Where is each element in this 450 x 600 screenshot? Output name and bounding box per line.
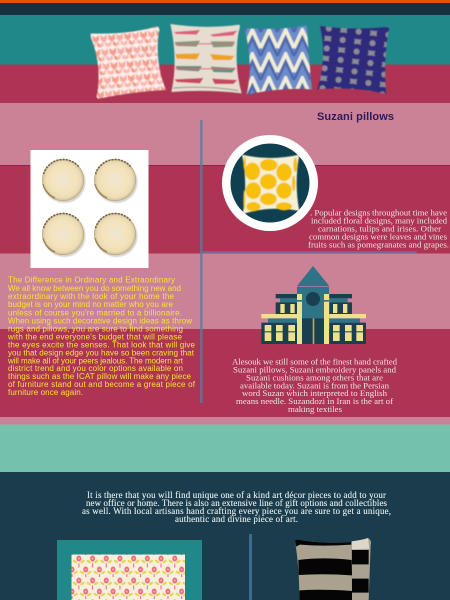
text block: Alesouk: Suzani pillows, Suzani embroidery panels and [233,364,397,374]
text block: the difference in ordinary and extraordinary: of furniture stand out and become a great piece of [8,380,196,389]
text block: Alesouk: word Suzan which interpreted to English [242,388,388,398]
pillow: pink chevron [91,26,166,99]
text block: popular designs: fruits such as pomegranates and grapes. [308,240,449,250]
text block: popular designs: included floral designs, many included [311,216,448,226]
text block: Alesouk: Suzani cushions among others that are [246,372,383,382]
icon: building [261,266,366,344]
text block: unique art decor: new office or home. There is also an extensive line of gift options and collectibles [86,498,388,508]
text block: Alesouk: Alesouk we still some of the finest hand crafted [232,356,398,366]
pillow: ikat arrows [170,24,242,93]
text block: popular designs [308,208,449,250]
text block: the difference in ordinary and extraordinary: things such as the ICAT pillow will make any piece [8,372,192,381]
icon: yellow pillow in circle [222,135,318,231]
text block: the difference in ordinary and extraordinary: the eyes excite the senses. That look that will give [8,340,196,350]
text block: popular designs: common designs were leaves and vines [309,232,448,242]
text block: the difference in ordinary and extraordinary: unless of course you're married to a billionaire. [8,308,182,317]
text block: the difference in ordinary and extraordinary: with the end everyone's budget that will please [7,332,183,342]
text block: Alesouk: available today. Suzani is from the Persian [240,380,390,390]
text block: unique art decor: as well. With local artisans hand crafting every piece you are sure to get a unique, [82,506,391,516]
pillow: black and cream stripes [295,538,371,600]
text block: the difference in ordinary and extraordinary: budget is on your mind no matter who you are [8,300,174,309]
divider line [249,534,252,600]
text block: unique art decor: It is there that you will find unique one of a kind art décor pieces to add to your [87,490,386,500]
text block: Alesouk: making textiles [288,404,343,414]
text block: the difference in ordinary and extraordinary: When using such decorative design ideas as throw [8,316,192,325]
text block: the difference in ordinary and extraordinary [7,276,196,397]
text block: the difference in ordinary and extraordinary: you that design edge you have so been craving that [8,348,195,358]
text block: the difference in ordinary and extraordinary: will make all of your peers jealous. The modern art [7,356,184,365]
text block: the difference in ordinary and extraordinary: The Difference in Ordinary and Extraordinary [8,276,175,285]
text block: the difference in ordinary and extraordinary: We all know between you do something new and [8,284,181,293]
text block: the difference in ordinary and extraordinary: extraordinary with the look of your home the [8,292,175,301]
text block: Alesouk: means needle. Suzandozi in Iran is the art of [236,396,393,406]
text block: popular designs: carnations, tulips and irises. Other [318,224,441,234]
pillow row [91,24,389,99]
image: four decorative plates [30,150,148,268]
pillow: blue zigzag [244,25,312,95]
pillow: navy ikat [317,26,389,94]
text block: unique art decor [82,490,391,524]
text block: popular designs: . Popular designs throughout time have [310,208,447,218]
text block: Alesouk [232,356,398,414]
text block: the difference in ordinary and extraordinary: rugs and pillows, you are sure to find something [8,324,183,334]
framed floral textile [57,540,202,600]
text block: the difference in ordinary and extraordinary: furniture once again. [8,388,83,397]
text block: unique art decor: authentic and divine piece of art. [175,514,298,524]
text block: the difference in ordinary and extraordinary: district trend and you color options available on [8,364,183,373]
heading: Suzani pillows: Suzani pillows [317,111,394,123]
divider lines [200,120,417,403]
